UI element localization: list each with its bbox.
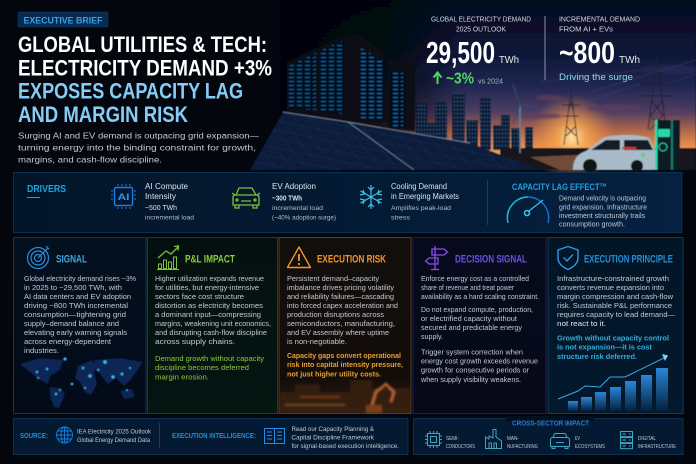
badge: executive brief: EXECUTIVE BRIEF	[24, 15, 103, 25]
callout: structure risk deferred.	[557, 352, 637, 361]
text block: availability as a hard scaling constraint.	[421, 292, 539, 301]
hero image: data center, solar, skyline, sunset, EV	[250, 0, 696, 182]
text block: supply.	[421, 332, 443, 341]
execution intelligence	[172, 426, 399, 450]
text block: AI data centers and EV adoption	[24, 292, 131, 301]
sector: digital infrastructure	[620, 432, 676, 450]
text block: Do not expand compute, production,	[421, 305, 533, 314]
title: AND MARGIN RISK	[18, 102, 189, 127]
stat: incremental demand: FROM AI + EVs	[559, 24, 613, 34]
panel: execution risk	[279, 238, 411, 414]
text: capacity lag description	[559, 196, 647, 229]
subtitle	[18, 130, 259, 164]
stat: global electricity demand: 29,500	[426, 35, 495, 70]
stat: global electricity demand: ~3%	[446, 70, 474, 88]
text block: in 2025 to ~29,500 TWh, with	[24, 283, 122, 292]
text block: driving ~800 TWh incremental	[24, 301, 128, 310]
pylons	[540, 56, 696, 145]
text block: growth for consecutive periods or	[421, 366, 529, 375]
text block: risk. Sustainable P&L performance	[557, 301, 672, 310]
callout: discipline becomes deferred	[155, 363, 249, 372]
execution intelligence: Capital Discipline Framework	[292, 434, 375, 442]
stat: global electricity demand: 2025 OUTLOOK	[456, 24, 506, 34]
stat: global electricity demand: vs 2024	[478, 76, 503, 86]
text block: Persistent demand–capacity	[287, 274, 379, 283]
text block: and reliability failures—cascading	[287, 292, 394, 301]
icon: AI chip	[111, 184, 136, 209]
execution intelligence: Read our Capacity Planning &	[292, 426, 375, 433]
stat: incremental demand: ~800	[559, 35, 615, 70]
text block: secured and predictable energy	[421, 323, 522, 332]
stat: incremental demand: TWh	[619, 54, 640, 66]
text block: distortion as electricity becomes	[155, 301, 263, 310]
title: GLOBAL UTILITIES & TECH:	[18, 32, 267, 57]
text block: Global electricity demand rises ~3%	[24, 274, 136, 283]
badge: executive brief	[18, 12, 108, 27]
icon: target	[28, 246, 49, 268]
heading: drivers: DRIVERS	[27, 184, 66, 195]
icon: growth chart	[157, 246, 179, 270]
text block: Higher utilization expands revenue	[155, 274, 264, 283]
stat: incremental demand: INCREMENTAL DEMAND	[559, 14, 640, 24]
source	[20, 427, 152, 444]
heading: CROSS-SECTOR IMPACT	[512, 418, 589, 428]
source: Global Energy Demand Data	[77, 437, 150, 444]
sector: semiconductors	[425, 431, 475, 450]
icon: signpost	[426, 246, 448, 270]
text block	[24, 274, 136, 355]
footer: source and execution intelligence	[14, 418, 408, 454]
text block: imbalance drives pricing volatility	[287, 283, 394, 292]
heading: P&L IMPACT	[185, 254, 235, 266]
stat: global electricity demand	[426, 14, 531, 88]
title: ELECTRICITY DEMAND +3%	[18, 55, 272, 80]
callout: Demand growth without capacity	[155, 354, 264, 363]
driver: EV adoption	[272, 182, 336, 222]
text block: Enforce energy cost as a controlled	[421, 274, 529, 283]
callout: risk into capital intensity pressure,	[287, 360, 403, 369]
text: capacity lag description: investment structurally trails	[559, 213, 645, 220]
panel: P&L impact	[148, 238, 278, 414]
subtitle: turning energy into the binding constraint for growth,	[18, 142, 256, 152]
callout	[155, 354, 264, 381]
driver: EV adoption: (~40% adoption surge)	[272, 214, 336, 222]
icon: snowflake	[360, 185, 382, 209]
text block: requires capacity to lead demand—	[557, 310, 675, 319]
server racks	[287, 34, 384, 122]
panel: signal	[14, 238, 146, 414]
driver: cooling: stress	[391, 214, 411, 222]
heading: capacity lag effect: CAPACITY LAG EFFECT™	[512, 182, 607, 193]
text block: supply–demand balance and	[24, 319, 119, 328]
text block: for utilities, but energy-intensive	[155, 283, 259, 292]
text: capacity lag description: consumption growth.	[559, 222, 625, 229]
icon: AI chip: AI	[118, 192, 130, 203]
text block: across energy-dependent	[24, 337, 112, 346]
text block: a dominant input—compressing	[155, 310, 261, 319]
driver: AI compute: Intensity	[145, 192, 176, 201]
icon: EV car	[232, 188, 260, 208]
subtitle: Surging AI and EV demand is outpacing grid expansion—	[18, 130, 259, 140]
stat: incremental demand: Driving the surge	[559, 72, 633, 83]
EV car	[573, 135, 655, 173]
factory image	[280, 380, 410, 413]
heading: EXECUTION RISK	[317, 254, 386, 266]
icon: shield check	[558, 246, 578, 270]
text block: margin compression and cash-flow	[557, 292, 674, 301]
sector: digital infrastructure: INFRASTRUCTURE	[638, 444, 676, 450]
title	[18, 32, 272, 127]
driver: cooling: Amplifies peak-load	[391, 205, 451, 212]
text: capacity lag description: grid expansion. Infrastructure	[559, 204, 647, 211]
text block: is non-negotiable.	[287, 337, 347, 346]
driver: cooling	[391, 182, 459, 222]
stat: global electricity demand: GLOBAL ELECTRICITY DEMAND	[431, 14, 531, 24]
stat: global electricity demand: TWh	[499, 54, 519, 66]
callout: Capacity gaps convert operational	[287, 351, 401, 360]
stat: incremental demand	[559, 14, 640, 83]
text block: when supply visibility weakens.	[420, 375, 521, 384]
source: IEA Electricity 2025 Outlook	[77, 428, 152, 436]
sector: EV ecosystems: ECOSYSTEMS	[575, 444, 605, 450]
driver: cooling: Cooling Demand	[391, 182, 447, 191]
panel: decision signal	[413, 238, 546, 414]
driver: AI compute: ~500 TWh	[145, 205, 177, 212]
text block: and disrupting cash-flow discipline	[155, 328, 267, 337]
execution intelligence: for signal-based execution intelligence.	[292, 443, 399, 450]
world map	[20, 357, 143, 408]
heading: SIGNAL	[56, 254, 87, 266]
skyline	[416, 93, 533, 150]
ground	[500, 148, 696, 170]
subtitle: margins, and cash-flow discipline.	[18, 154, 162, 164]
text block: or electrified capacity without	[421, 314, 518, 323]
text block	[420, 274, 539, 384]
text block: into forced capex acceleration and	[287, 301, 398, 310]
text block: energy cost growth exceeds revenue	[421, 357, 538, 366]
callout: margin erosion.	[155, 372, 209, 381]
text block	[287, 274, 398, 346]
driver: AI compute: incremental load	[145, 214, 194, 222]
source: SOURCE:	[20, 431, 48, 440]
text block: and EV assembly where uptime	[287, 328, 389, 337]
EV charger	[655, 120, 680, 170]
callout	[557, 334, 669, 361]
sector: digital infrastructure: DIGITAL	[638, 436, 656, 442]
driver: cooling: in Emerging Markets	[391, 192, 459, 201]
sector: manufacturing	[486, 430, 538, 450]
text block: Infrastructure-constrained growth	[557, 274, 669, 283]
text block: industries.	[24, 346, 59, 355]
sector: EV ecosystems: EV	[575, 436, 580, 442]
icon: warning triangle	[288, 247, 310, 268]
driver: EV adoption: incremental load	[272, 205, 323, 212]
execution intelligence: EXECUTION INTELLIGENCE:	[172, 431, 256, 440]
sector: manufacturing: MAN-	[507, 436, 519, 442]
text block	[557, 274, 675, 328]
text block: production disruptions across	[287, 310, 384, 319]
sector: EV ecosystems	[550, 434, 605, 450]
text block: share of revenue and treat power	[421, 283, 514, 292]
callout: not just higher utility costs.	[287, 369, 381, 378]
chart: rising bars and trend arrow	[558, 354, 668, 411]
panel: execution principle	[548, 238, 683, 414]
panel: drivers band	[14, 172, 682, 232]
text block: elevating early warning signals	[24, 328, 127, 337]
text block: semiconductors, manufacturing,	[287, 319, 395, 328]
text block: across supply chains.	[155, 337, 235, 346]
text block: not react to it.	[557, 319, 606, 328]
driver: EV adoption: EV Adoption	[272, 182, 316, 191]
text block: consumption—tightening grid	[24, 310, 126, 319]
callout: is not expansion—it is cost	[557, 343, 652, 352]
sector: semiconductors: SEMI-	[446, 436, 459, 442]
icon: globe	[56, 427, 72, 443]
driver: EV adoption: ~300 TWh	[272, 196, 302, 202]
text: capacity lag description: Demand velocity is outpacing	[559, 196, 646, 202]
text block: converts revenue expansion into	[557, 283, 664, 292]
icon: open book	[264, 428, 284, 444]
solar panels	[250, 112, 540, 170]
title: EXPOSES CAPACITY LAG	[18, 78, 243, 104]
text block: sectors face cost structure	[155, 292, 244, 301]
heading: DECISION SIGNAL	[455, 254, 527, 266]
text block: margins, weakening unit economics,	[155, 319, 271, 328]
sector: manufacturing: NUFACTURING	[507, 444, 538, 450]
text block	[155, 274, 271, 346]
callout	[287, 351, 403, 378]
sector: semiconductors: CONDUCTORS	[446, 444, 475, 450]
wind turbine	[513, 84, 538, 153]
panel: cross-sector impact	[414, 416, 683, 454]
icon: gauge	[507, 197, 549, 223]
callout: Growth without capacity control	[557, 334, 669, 343]
text block: Trigger system correction when	[421, 348, 523, 357]
driver: AI compute: AI Compute	[145, 182, 189, 191]
driver: AI compute	[145, 182, 194, 222]
